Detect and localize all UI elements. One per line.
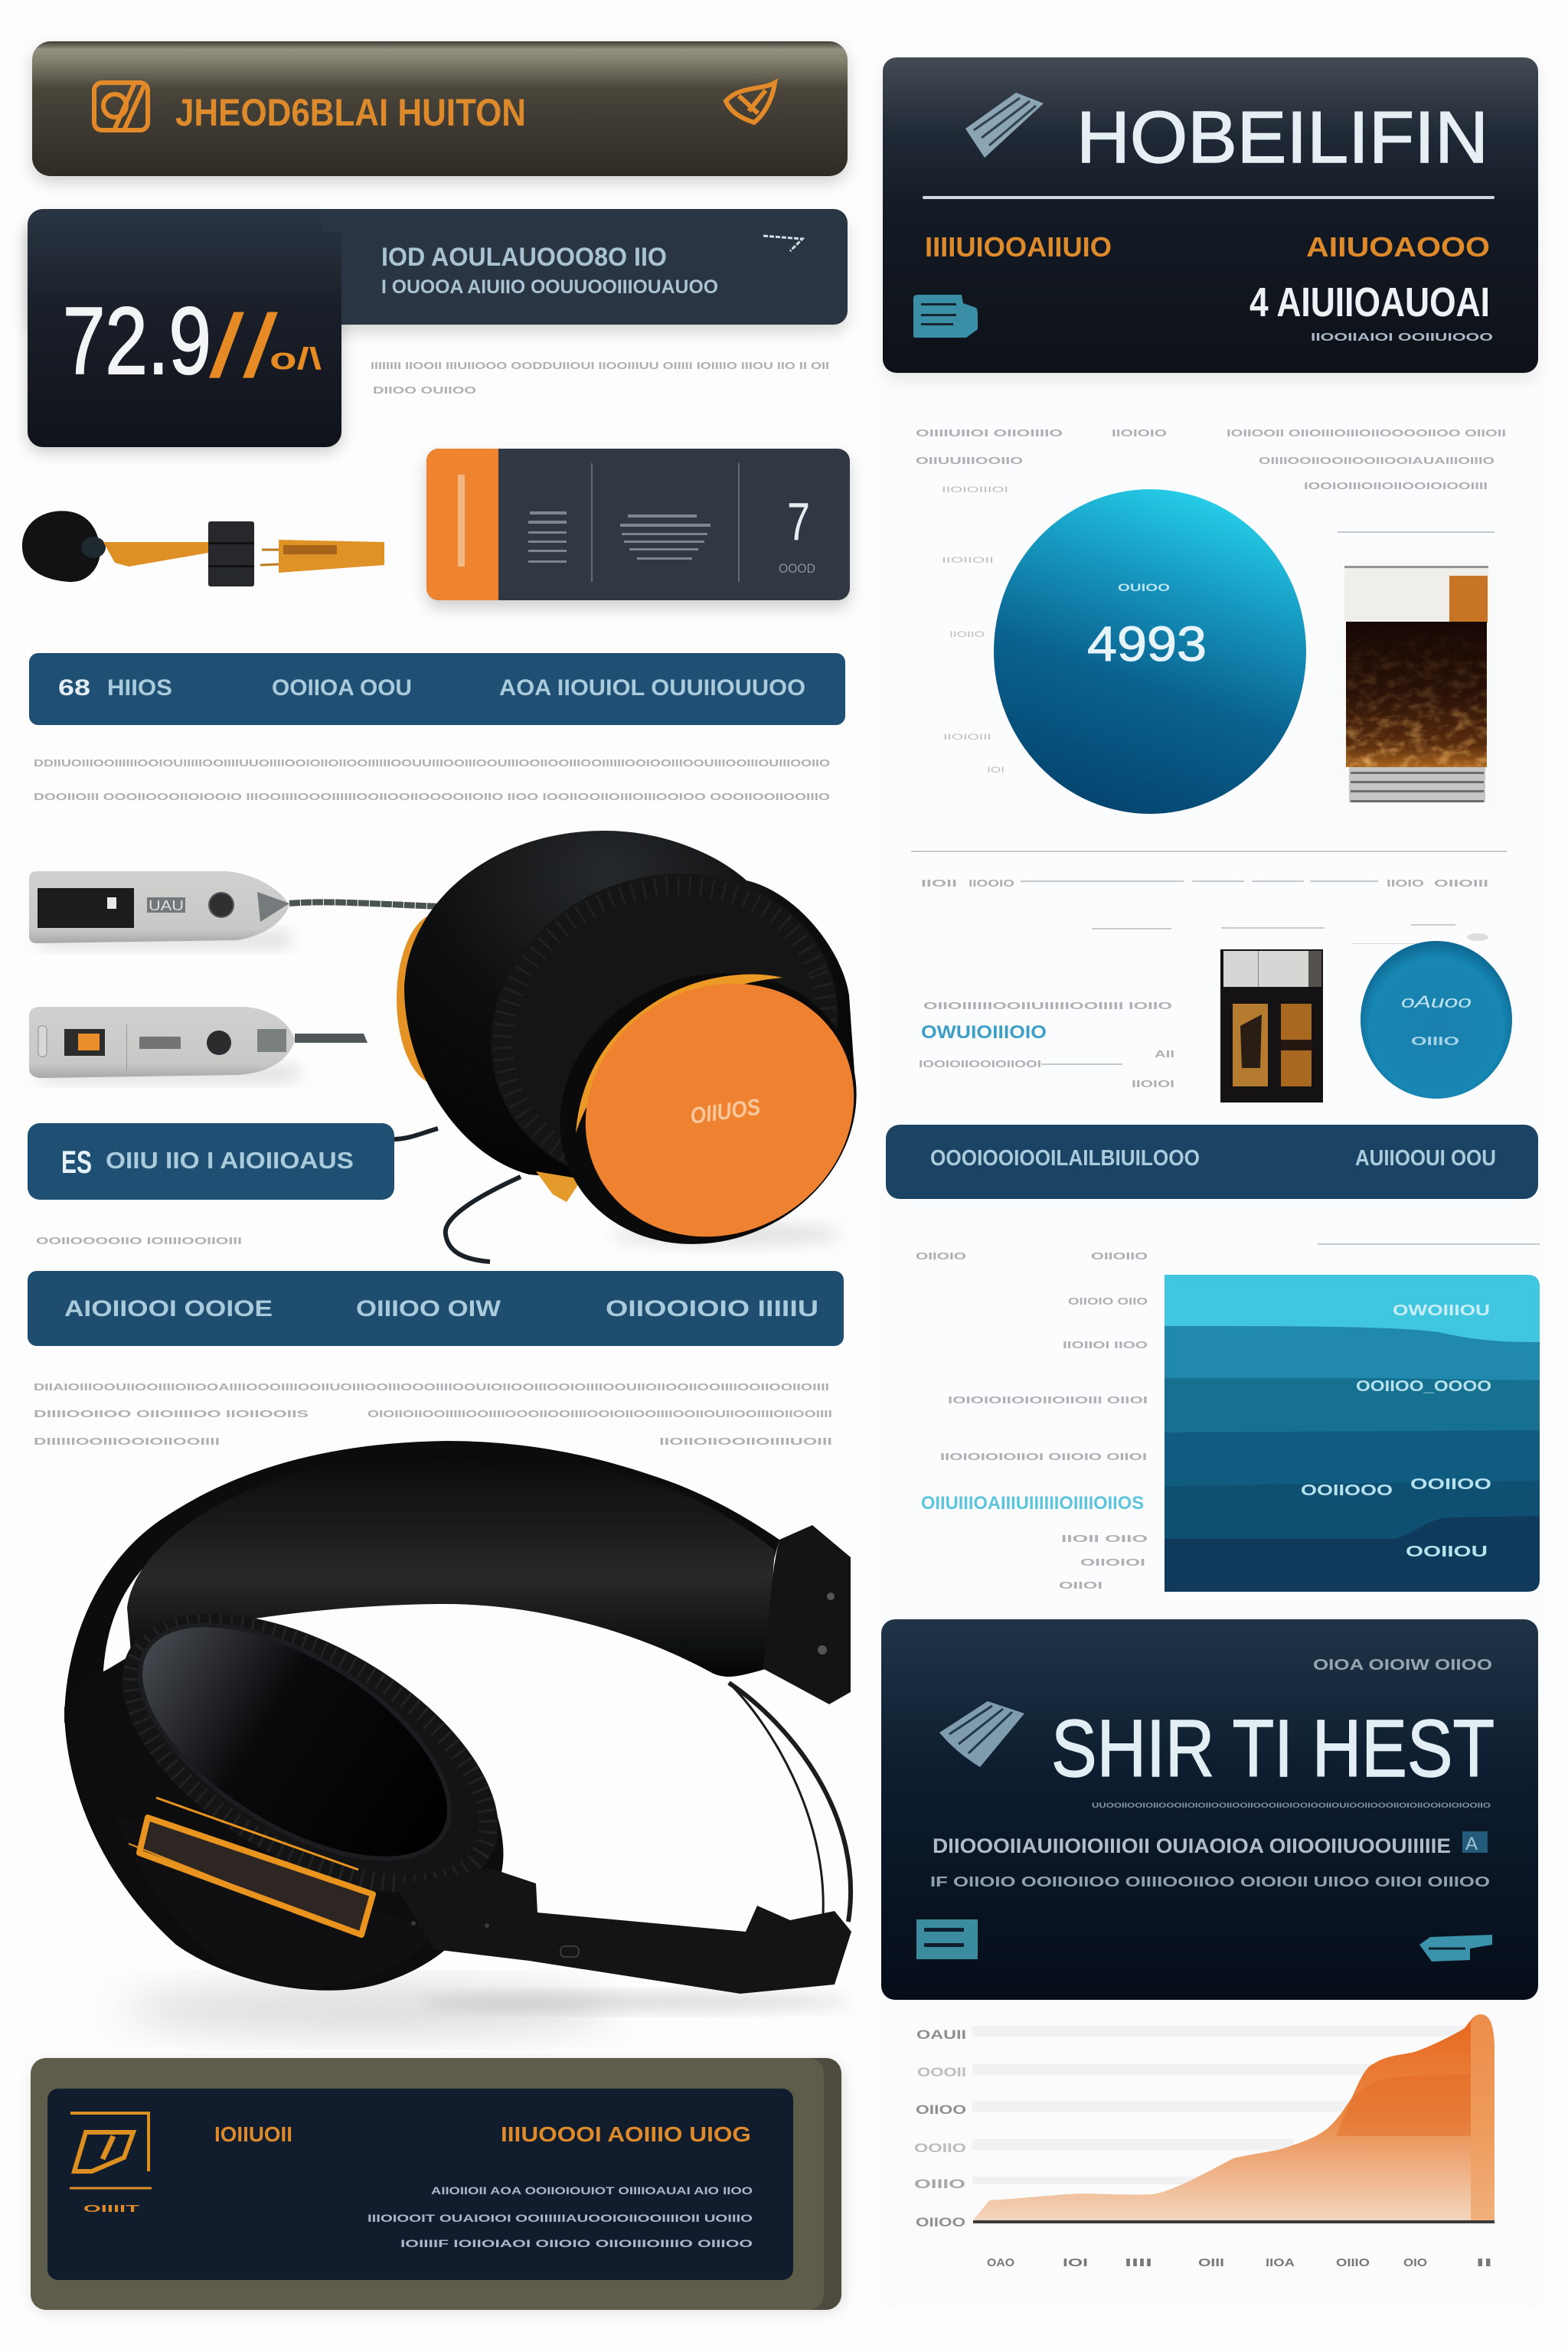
- text row: mid section: [921, 877, 1488, 944]
- icon: orange eye badge: [70, 2113, 152, 2188]
- x axis labels: II: [1476, 2256, 1492, 2269]
- text block: top of circle section: [916, 427, 1506, 492]
- band labels: OOIIOO_OOOO: [1356, 1378, 1491, 1395]
- caption: oAuoo: [1401, 992, 1472, 1011]
- band labels: OOIIOU: [1406, 1544, 1488, 1560]
- chart labels: circle left: IIOIIOII: [942, 556, 994, 565]
- device screen: [38, 888, 134, 928]
- panel: stat card 72.9%: [28, 209, 848, 452]
- disc label: OIIUOS: [688, 1094, 762, 1129]
- labels: left of stacked chart: IIOIOIOIOIIOI OIIOIO OIIOI: [940, 1451, 1147, 1462]
- text row: mid section: OIIOIII: [1434, 877, 1488, 889]
- text block: left of product: OIIOIIIIIIOOIIUIIIIIOOIIIII IOIIO: [923, 1000, 1172, 1011]
- area: [973, 2014, 1494, 2220]
- text: bar heading: IOD AOULAUOOO8O IIO: [381, 243, 667, 272]
- ear cup shell: [64, 1630, 503, 1991]
- rule above glass: [1338, 531, 1494, 533]
- y axis labels: OIIOO: [916, 2215, 965, 2230]
- panel: orange ticket card: [426, 449, 850, 608]
- text: caption: OOIIOOOOIIO IOIIIIOOIIOIII: [36, 1235, 242, 1246]
- highlighted blue line: OWUIOIIIOIO: [921, 1022, 1047, 1043]
- text row: mid section: IIOOIO: [969, 877, 1014, 889]
- heading: HOBEILIFIN: [1076, 96, 1488, 178]
- x axis labels: IIII: [1125, 2256, 1152, 2269]
- panel: SHIR TI HEST: [881, 1619, 1538, 2000]
- chart labels: circle left: IIOIOIII: [943, 733, 991, 742]
- cable connector parts: [22, 511, 384, 586]
- panel: product header: [883, 57, 1538, 381]
- arm: [395, 1868, 851, 1994]
- blue bar 3: AIOIIOOI OOIOE: [64, 1296, 273, 1321]
- chart labels: circle left: IIOIIO: [949, 630, 985, 639]
- header bar: brown title: [32, 41, 848, 182]
- cable: orange: [103, 542, 208, 567]
- circle caption: OUIOO: [1118, 581, 1170, 593]
- text block: top of circle section: IOIIOOII OIIOIIIOIIIOIIOOOOIIOO OIIOII: [1227, 427, 1506, 439]
- dark bar: OOOIOOIOOILAILBIUILOOO: [930, 1146, 1200, 1171]
- blue bar 1: HIIOS: [107, 675, 172, 701]
- thin wires: [729, 1683, 851, 1922]
- icon: beer glass: [1344, 566, 1488, 802]
- device: grey remote 2: [29, 1007, 368, 1083]
- bar icon: ES: [61, 1144, 92, 1180]
- heading: title text: JHEOD6BLAI HUITON: [175, 91, 526, 134]
- icon: slanted stripes: [965, 93, 1044, 158]
- headband pad: [127, 1456, 775, 1677]
- labels: left of stacked chart: [916, 1250, 1148, 1591]
- grid bands: [972, 2026, 1470, 2184]
- blue bar 3: OIIIOO OIW: [356, 1296, 501, 1321]
- text block: top of circle section: OIIIIOOIIOOIIOOIIOOIAUAIIIOIIIO: [1259, 455, 1494, 466]
- illustration: black headphone: [64, 1441, 851, 2034]
- text block: left of product: [919, 1000, 1174, 1089]
- slider: [139, 1037, 181, 1049]
- device label: UAU: [149, 898, 184, 913]
- text block: three lines: IIOIIOIIOOIIOIIIIUOIII: [659, 1436, 832, 1447]
- chart: blue circle: [994, 489, 1306, 814]
- stat small suffix: o/\: [270, 342, 322, 376]
- orange disc: [539, 935, 900, 1285]
- panel: olive footer card: [31, 2058, 841, 2310]
- band labels: OWOIIIOU: [1393, 1302, 1490, 1319]
- small label: OOOD: [779, 561, 815, 576]
- icon caption: OIIIIT: [83, 2203, 139, 2214]
- column 2 lines: [620, 514, 710, 560]
- y axis labels: OIIOO: [916, 2102, 966, 2117]
- glossy lens: [102, 1578, 488, 1906]
- labels: left of stacked chart: OIIOIO: [916, 1250, 966, 1262]
- labels: left of stacked chart: IOIOIOIIOIOIIOIIOIII OIIOI: [948, 1394, 1148, 1406]
- blue bar 3: OIIOOIOIO IIIIIU: [606, 1296, 818, 1321]
- labels: left of stacked chart: OIIOIIO: [1091, 1250, 1148, 1262]
- labels: left of stacked chart: OIIOIO OIIO: [1068, 1295, 1148, 1307]
- text row: mid section: IIOIO: [1387, 877, 1424, 889]
- text block: left of product: IIOIOI: [1132, 1078, 1174, 1089]
- chart: small blue circle: [1361, 941, 1512, 1099]
- lower shell: [115, 1815, 436, 1987]
- y axis labels: OOOII: [917, 2065, 966, 2079]
- text block: three lines: DIIAIOIIIOOUIIOOIIIIOIIOOAIIIIOOOIIIIOOIIUOIIIOOIIIOOOIIIIOOUIOIIOOIIIOOIOIIIIOOUIIOIIOOIIOOIIIIOOIIOOIIOIIII: [34, 1381, 829, 1393]
- text block: under stat card: IIIIIIII IIOOII IIIUIIOOO OODDUIIOUI IIOOIIIUU OIIIII IOIIIIO IIIOU IIO II OII: [371, 360, 829, 371]
- highlighted cyan line: OIIUIIIOAIIIUIIIIIIOIIIIOIIOS: [921, 1493, 1144, 1514]
- text block: under stat card: [371, 360, 829, 396]
- chart labels: circle left: IOI: [987, 766, 1004, 775]
- y axis labels: OAUII: [916, 2027, 966, 2042]
- liquid: [1346, 622, 1487, 767]
- value: OIIIO: [1411, 1035, 1459, 1048]
- column 1 lines: [528, 511, 567, 563]
- x axis labels: IOI: [1063, 2256, 1088, 2269]
- text: orange label left: IOIIUOII: [214, 2122, 292, 2146]
- blue bar 1: AOA IIOUIOL OUUIIOUUOO: [499, 675, 805, 701]
- x axis labels: OIO: [1403, 2256, 1427, 2269]
- orange labels: IIIIUIOOAIIUIO: [925, 231, 1112, 263]
- connector pin: orange: [260, 540, 384, 573]
- body line 2: IF OIIOIO OOIIOIIOO OIIIIOOIIOO OIOIOII UIIOO OIIOI OIIIOO: [930, 1874, 1490, 1890]
- stat percent sign: //: [210, 296, 278, 396]
- ground shadow: [122, 1985, 612, 2034]
- vertical label on orange strip: [458, 475, 465, 567]
- rule: [1318, 1243, 1540, 1245]
- front ring: [515, 925, 901, 1292]
- dark bar: [886, 1125, 1538, 1199]
- switch: [38, 1026, 47, 1057]
- labels: left of stacked chart: OIIOIOI: [1080, 1557, 1145, 1568]
- labels: left of stacked chart: IIOIIOI IIOO: [1063, 1339, 1148, 1351]
- text: body lines: [368, 2184, 753, 2249]
- icon: orange badge: [94, 83, 148, 130]
- chart: orange area: [880, 2000, 1544, 2307]
- back pad silhouette: [404, 831, 854, 1194]
- text block: left of product: AII: [1155, 1048, 1174, 1060]
- orange frame: [139, 1818, 373, 1935]
- icon: teal rectangle: [916, 1919, 978, 1959]
- x axis labels: [987, 2256, 1492, 2269]
- dark bar: AUIIOOUI OOU: [1355, 1146, 1496, 1171]
- cable to headphone: [289, 902, 439, 906]
- text block: three lines: DIIIIIIOOIIIOOIOIIOOIIII: [34, 1436, 220, 1447]
- y axis labels: OIIIO: [914, 2177, 965, 2191]
- bold stat line: 4 AIUIIOAUOAI: [1250, 279, 1490, 325]
- text row: mid section: IIOII: [921, 877, 957, 889]
- device: grey remote 1: [29, 871, 439, 949]
- foam: [1344, 567, 1488, 622]
- text block: top of circle section: IOOIOIIIOIIOIIOOIOIOOIIII: [1304, 480, 1488, 492]
- circle value: 4993: [1087, 616, 1207, 671]
- band labels: OOIIOO: [1410, 1476, 1491, 1493]
- blue bar 1: [29, 653, 845, 725]
- icon: teal box: [913, 295, 978, 338]
- cable: bar to headphone: [392, 1129, 438, 1139]
- text: body lines: IIIOIOOIT OUAIOIOI OOIIIIIIAUOOIOIIOOIIIIOII UOIIIO: [368, 2212, 753, 2224]
- chart: stacked bands: [1165, 1275, 1540, 1592]
- small boxed icon: A: [1465, 1834, 1478, 1854]
- device knob: [209, 893, 234, 917]
- blue bar 2: [28, 1123, 394, 1200]
- text block: top of circle section: OIIUUIIIOOIIO: [916, 455, 1023, 466]
- orange label right: AIIUOAOOO: [1306, 231, 1490, 263]
- small caption: IIOOIIAIOI OOIIUIOOO: [1311, 331, 1493, 344]
- stat number: 72.9: [63, 289, 211, 394]
- y axis labels: [914, 2027, 966, 2230]
- text block: top of circle section: IIOIOIO: [1112, 427, 1167, 439]
- plug tail: [295, 1034, 368, 1043]
- orange button: [64, 1029, 105, 1056]
- glass base: [1349, 767, 1485, 802]
- icon: small arrow: [763, 236, 802, 251]
- text block: intro two lines: [34, 757, 830, 802]
- icon: earbud: [22, 511, 100, 582]
- text: body lines: IOIIIIF IOIIOIAOI OIIOIO OIIOIIIOIIIIO OIIIOO: [400, 2237, 753, 2249]
- heading: SHIR TI HEST: [1051, 1704, 1494, 1794]
- gold joint: [536, 1171, 582, 1202]
- icon: teal pen: [1419, 1935, 1492, 1962]
- text block: three lines: [34, 1381, 832, 1447]
- text block: intro two lines: DOOIIOIII OOOIIOOOIIOIOOIO IIIOOIIIIOOOIIIIIIOOIIOOIIOOOOIIOIIO IIOO IOOIIOOIIOIIIOIIIOOIOO OOOIIOOIIOOIIIO: [34, 791, 830, 802]
- text block: under stat card: DIIOO OUIIOO: [373, 384, 476, 396]
- icon: black product box: [1220, 949, 1323, 1102]
- text block: three lines: OIOIIOIIOOIIIIIOOIIIIOOOIIOOIIIIOOIOIIOOIIIIOOIIOUIIOOIIIIOIIOOIIII: [368, 1408, 832, 1419]
- right bracket: [763, 1525, 851, 1704]
- rule: [911, 851, 1507, 852]
- blue bar 2: OIIU IIO I AIOIIOAUS: [106, 1147, 354, 1174]
- x axis labels: OAO: [987, 2256, 1014, 2269]
- x axis labels: OIII: [1198, 2256, 1224, 2269]
- top caption: OIOA OIOIW OIIOO: [1313, 1657, 1492, 1674]
- baseline: [973, 2220, 1494, 2223]
- gold crescent: [576, 975, 782, 1133]
- bar icon text: 68: [58, 675, 90, 701]
- middle pad: [446, 825, 883, 1234]
- text block: top of circle section: OIIIIUIIOI OIIOIIIIO: [916, 427, 1063, 439]
- text: bar subheading: I OUOOA AIUIIO OOUUOOIIIOUAUOO: [381, 276, 718, 298]
- y axis labels: OOIIO: [914, 2141, 966, 2155]
- outer strap: [64, 1441, 779, 1723]
- text block: three lines: DIIIIOOIIOO OIIOIIIIOO IIOIIOOIIS: [34, 1408, 309, 1419]
- number 7: 7: [787, 492, 810, 551]
- text: body lines: AIIOIIOII AOA OOIIOIOUIOT OIIIIOAUAI AIO IIOO: [431, 2184, 753, 2197]
- illustration: orange headphone: [397, 825, 901, 1292]
- dashed rule text: UUOOIIOOIOIIOOOIIOIOIIOOIIOOIIOOOIIOIOOIOOIIOUIOOIIOOOIIOIOIIOOIOIOIOOIIO: [1092, 1802, 1491, 1809]
- cable loop: [446, 1177, 521, 1262]
- icon: slanted stripes: [939, 1701, 1024, 1767]
- labels: left of stacked chart: OIIOI: [1059, 1579, 1102, 1591]
- x axis labels: OIIIO: [1336, 2256, 1370, 2269]
- knob: [207, 1031, 231, 1055]
- band labels: OOIIOOO: [1301, 1482, 1393, 1499]
- body line 1: DIIOOOIIAUIIOIOIIIOII OUIAOIOA OIIOOIIUOOUIIIIIE: [933, 1834, 1451, 1857]
- chart labels: circle left: [942, 485, 1008, 775]
- small boxed icon: [1462, 1831, 1488, 1854]
- icon: orange leaf: [726, 83, 775, 122]
- x axis labels: IIOA: [1266, 2256, 1295, 2269]
- blue bar 1: OOIIOA OOU: [272, 675, 412, 701]
- text block: intro two lines: DDIIUOIIIOOIIIIIIOOIOUIIIIIOOIIIIUUOIIIIOOIOIIOIIOOIIIIIIOOUUIIIOOIIIOOUIIIOOIIOOIIIOOIIIIIIOOIOOIIIOOUIIIOOIIIOUIIIOOIIO: [34, 757, 830, 769]
- labels: left of stacked chart: IIOII OIIO: [1061, 1533, 1148, 1544]
- text block: left of product: IOOIOIIOOIOIIOOI: [919, 1058, 1041, 1070]
- band labels: [1301, 1302, 1491, 1560]
- connector block: [208, 521, 254, 586]
- orange rim: [397, 913, 479, 1085]
- text: orange label right: IIIUOOOI AOIIIO UIOG: [501, 2122, 751, 2146]
- panel: right column backdrop: [880, 373, 1544, 2307]
- ear pad: [76, 1557, 544, 1950]
- chart labels: circle left: IIOIOIIIOI: [942, 485, 1008, 495]
- blue bar 3: [28, 1271, 844, 1346]
